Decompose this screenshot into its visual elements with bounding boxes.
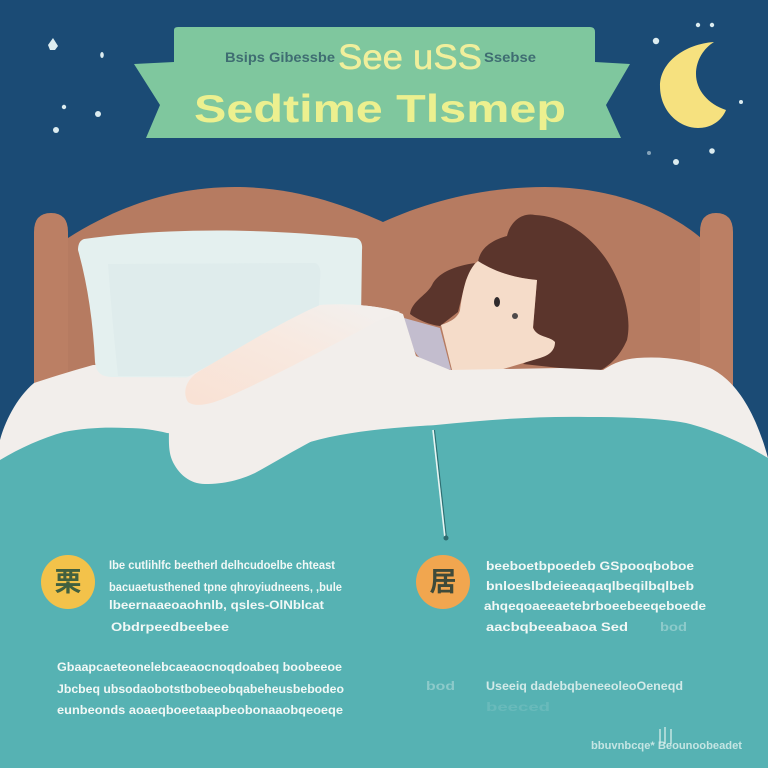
text block: tip 1: bacuaetusthened tpne qhroyiudneens, ,bule bbox=[109, 580, 342, 594]
bed sheets bbox=[186, 304, 768, 480]
body under the blanket edge bbox=[169, 383, 436, 484]
sleeping girl head bbox=[404, 214, 628, 372]
text block: tip 2 detail: bod bbox=[426, 679, 455, 693]
back hair bbox=[478, 214, 628, 372]
text block: tip 1 detail: eunbeonds aoaeqboeetaapbeobonaaobqeoeqe bbox=[57, 703, 343, 717]
left headboard arch bbox=[68, 187, 383, 400]
heading: first line: See uSS bbox=[338, 38, 482, 77]
text block: tip 1 bbox=[109, 558, 342, 634]
left hair bbox=[410, 263, 475, 326]
icon: orange badge: 居 bbox=[430, 567, 456, 597]
blanket bbox=[0, 417, 768, 768]
sheet behind pillow bbox=[0, 365, 200, 480]
eye left bbox=[494, 297, 500, 307]
collar bbox=[404, 318, 451, 370]
text block: tip 2 detail: Useeiq dadebqbeneeoleoOeneqd bbox=[486, 679, 683, 693]
stars bbox=[48, 23, 743, 165]
bed headboard bbox=[34, 187, 733, 410]
icon: crescent moon bbox=[660, 42, 726, 128]
text block: tip 2: beeboetbpoedeb GSpooqboboe bbox=[486, 559, 694, 573]
right bedpost bbox=[700, 213, 733, 410]
footer credit bbox=[591, 727, 742, 752]
eye right bbox=[512, 313, 518, 319]
arm bbox=[185, 304, 400, 405]
text block: tip 1: Obdrpeedbeebee bbox=[111, 620, 229, 634]
text block: tip 2 bbox=[484, 559, 706, 634]
text block: tip 2: bnloeslbdeieeaqaqlbeqilbqlbeb bbox=[486, 579, 694, 593]
text block: tip 2 detail: beeced bbox=[486, 700, 550, 714]
heading: first line: Bsips Gibessbe bbox=[225, 49, 335, 65]
text block: tip 1: lbeernaaeoaohnlb, qsles-OlNblcat bbox=[109, 598, 324, 612]
text block: tip 1: Ibe cutlihlfc beetherl delhcudoelbe chteast bbox=[109, 558, 335, 572]
face bbox=[441, 261, 555, 370]
text block: tip 1 detail: Gbaapcaeteonelebcaeaocnoqdoabeq boobeeoe bbox=[57, 660, 342, 674]
heading: first line: Ssebse bbox=[484, 49, 536, 65]
footer credit: bbuvnbcqe* Beounoobeadet bbox=[591, 740, 742, 752]
title banner bbox=[134, 27, 630, 138]
pillow bbox=[78, 231, 362, 378]
banner ribbon bbox=[134, 27, 630, 138]
icon: yellow badge: 栗 bbox=[54, 567, 82, 597]
icon: yellow badge bbox=[41, 555, 95, 609]
right headboard arch bbox=[383, 187, 701, 400]
text block: tip 2: ahqeqoaeeaetebrboeebeeqeboede bbox=[484, 599, 706, 613]
text block: tip 1 detail bbox=[57, 660, 344, 717]
arrow line bbox=[433, 430, 448, 540]
text block: tip 2 detail bbox=[426, 679, 683, 714]
text block: tip 1 detail: Jbcbeq ubsodaobotstbobeeobqabeheusbebodeo bbox=[57, 682, 344, 696]
tip 1 bbox=[41, 555, 342, 634]
heading: second line: Sedtime Tlsmep bbox=[194, 88, 566, 131]
text block: tip 2: bod bbox=[660, 620, 687, 634]
icon: orange badge bbox=[416, 555, 470, 609]
heading: first line bbox=[225, 38, 536, 77]
left bedpost bbox=[34, 213, 68, 410]
tip 2 bbox=[416, 555, 706, 634]
text block: tip 2: aacbqbeeabaoa Sed bbox=[486, 620, 628, 634]
